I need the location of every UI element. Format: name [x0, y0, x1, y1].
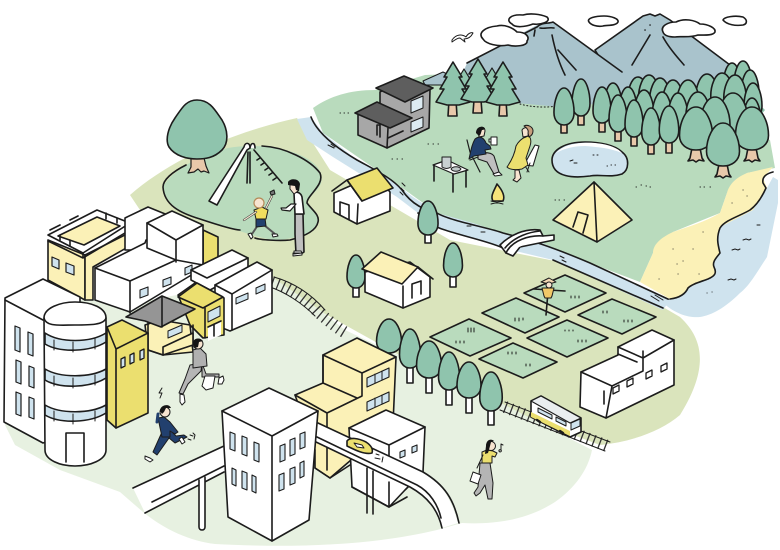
monorail car [347, 438, 383, 462]
train [531, 396, 581, 437]
cloud large left [481, 25, 528, 46]
right white house [215, 262, 272, 331]
small tree by river [418, 201, 438, 243]
tent [553, 182, 632, 242]
river bank lower [418, 213, 663, 308]
head [290, 182, 298, 194]
coat [542, 288, 554, 298]
front row trees [572, 79, 590, 116]
arm with bag [477, 455, 483, 468]
head [193, 339, 203, 349]
cloud right [662, 20, 715, 37]
shirt [294, 192, 304, 214]
trousers [295, 214, 304, 254]
building: tall white left [4, 279, 80, 443]
building: small white center [349, 410, 425, 507]
chair [524, 145, 539, 166]
back row trees [723, 63, 741, 98]
factory windows [613, 363, 667, 394]
windows [400, 445, 417, 458]
legs [252, 225, 275, 234]
mountain: left peak [460, 22, 640, 107]
back block [125, 207, 180, 250]
pale roof house [362, 252, 433, 308]
meadow grass marks [340, 113, 710, 200]
top [482, 450, 497, 463]
windows [236, 284, 265, 304]
person: father [281, 179, 304, 256]
shirt [254, 207, 268, 219]
head [522, 128, 529, 137]
yellow block behind [203, 230, 218, 267]
monorail: right track [316, 423, 459, 528]
tree right of pale house [444, 243, 462, 287]
white factory [580, 330, 674, 418]
forest: rounded trees [554, 61, 768, 178]
person: woman in yellow dress [507, 125, 539, 182]
river banks [311, 117, 670, 300]
music note [499, 444, 503, 452]
front tree trunks [561, 114, 672, 154]
hair [524, 125, 533, 137]
playground lawn outline [163, 146, 321, 240]
legs [513, 170, 521, 182]
toy [270, 190, 275, 195]
beach sand [640, 167, 773, 299]
house upper roof [376, 76, 433, 102]
building: small yellow [178, 283, 224, 341]
shoes [180, 376, 224, 405]
building: white block group [95, 207, 218, 313]
legs [153, 430, 187, 455]
head [478, 127, 485, 137]
windows left face [230, 432, 259, 493]
fir front [436, 62, 470, 105]
slide [209, 143, 282, 205]
mug [489, 137, 497, 145]
bird [452, 33, 473, 42]
flared trunks [688, 148, 760, 178]
fir trunks [448, 100, 507, 116]
house walls [358, 78, 430, 148]
yellow stripe [531, 412, 570, 436]
body [193, 348, 207, 368]
shoreline [670, 172, 773, 299]
windows [15, 326, 34, 419]
rice fields [430, 275, 656, 378]
river ripples [328, 144, 566, 262]
monorail: left track [133, 446, 225, 530]
plate [451, 167, 461, 171]
shoe [493, 172, 502, 176]
mountain ridges [467, 22, 684, 75]
big round tree [167, 100, 227, 173]
arm [281, 204, 296, 211]
main lower block [95, 230, 203, 312]
motion marks [159, 388, 195, 440]
person: businessman walking with bag [179, 339, 224, 405]
legs [179, 363, 202, 394]
tower block [147, 211, 203, 265]
pillars [367, 468, 373, 514]
building: cylinder tower [44, 302, 106, 466]
hair [476, 127, 485, 136]
building: large yellow center [295, 338, 396, 478]
windows [52, 257, 74, 275]
head [486, 442, 496, 450]
trousers [478, 153, 499, 174]
person: child [244, 190, 278, 239]
mountains [423, 14, 740, 107]
hair [288, 179, 300, 191]
building: yellow narrow [107, 320, 148, 428]
arm [157, 414, 158, 422]
clouds [481, 14, 746, 46]
pot [442, 157, 451, 168]
cloud back [509, 14, 548, 27]
pillar [199, 477, 205, 530]
ground: countryside olive land [130, 118, 700, 445]
train roof [531, 396, 581, 423]
cloud far right [723, 16, 746, 25]
shoes [145, 437, 185, 462]
jacket [469, 137, 491, 159]
bag [202, 376, 215, 390]
hat [541, 278, 556, 284]
roof terrace [48, 210, 130, 253]
dress [507, 136, 531, 170]
scarecrow [534, 278, 565, 315]
shorts [256, 218, 266, 227]
ground: camp meadow [313, 70, 775, 282]
house lower roof [355, 102, 412, 128]
mountain: right peak [595, 14, 740, 90]
arms [244, 196, 272, 220]
roof [347, 168, 393, 201]
pond rim [556, 143, 622, 153]
field marks [456, 296, 632, 366]
gray two-storey house [355, 76, 433, 148]
window bands [45, 333, 106, 350]
house windows [411, 96, 423, 132]
sand and sea marks [651, 190, 760, 301]
windows right face [279, 432, 305, 491]
train windows [538, 408, 580, 430]
person: woman with bag and music [470, 440, 503, 499]
windows [121, 349, 144, 368]
windows [367, 368, 389, 411]
row of trees [377, 319, 502, 425]
yellow roof house [332, 168, 393, 224]
cloud middle [588, 16, 618, 26]
chair [467, 140, 480, 172]
building: central white tower [222, 388, 318, 541]
hills at left [423, 72, 460, 85]
body [158, 417, 178, 437]
ground: city pale green land [5, 277, 592, 546]
trousers [474, 463, 493, 499]
fir back [451, 69, 477, 101]
forest: fir trees [436, 59, 520, 116]
camp table [433, 157, 468, 192]
head [160, 407, 170, 417]
door [66, 433, 84, 462]
head [254, 198, 264, 208]
person: man in navy with mug [467, 127, 502, 176]
building: small white houses [191, 250, 272, 331]
pond [552, 142, 628, 177]
bridge [500, 230, 554, 256]
roof [362, 252, 418, 284]
gray roof [126, 296, 195, 327]
windows [140, 265, 192, 298]
person: businessman running on phone [145, 388, 195, 462]
railway track [270, 277, 610, 451]
building: yellow rooftop [48, 210, 135, 300]
tree left of pale house [347, 255, 365, 297]
campfire [491, 184, 504, 204]
playground lawn [163, 146, 322, 240]
sea [663, 177, 778, 317]
building: gray roof house [126, 296, 195, 355]
ladder [247, 150, 282, 183]
river [297, 117, 670, 310]
